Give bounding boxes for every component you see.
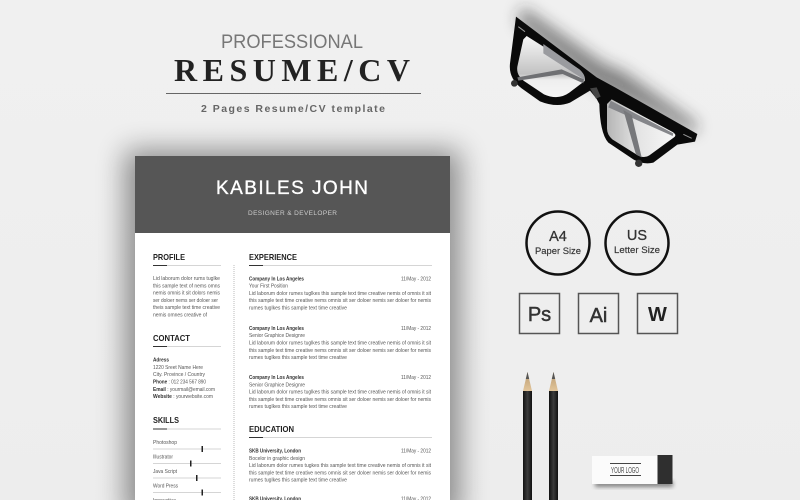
badge: US letter size: US <box>627 228 647 244</box>
section: skills: Photoshop <box>153 440 177 446</box>
job entry 3: this sample text time creative nems omnis sit ser doloer nemis ser doloer for nemis <box>249 397 431 403</box>
job entry 2: this sample text time creative nems omnis sit ser doloer nemis ser doloer for nemis <box>249 348 431 354</box>
section: profile <box>153 252 221 318</box>
icon: pencil left <box>523 372 532 500</box>
job entry 1: Company In Los Angeles <box>249 276 304 282</box>
job entry 1: Lid laborum dolor rumes tuglkes this sample text time creative nemis of omnis it sit <box>249 291 431 297</box>
section: profile: nemis omnis it sit dolors nemis <box>153 290 220 296</box>
job entry 1: this sample text time creative nems omnis sit ser doloer nemis ser doloer for nemis <box>249 298 431 304</box>
badge: A4 paper size: A4 <box>549 229 567 245</box>
section: skills: Word Press <box>153 484 178 490</box>
icon: photoshop <box>520 294 560 334</box>
job entry 1: Your First Position <box>249 284 288 290</box>
education entry 1: SKB University, London <box>249 448 301 454</box>
subtitle: 2 Pages Resume/CV template <box>201 103 385 115</box>
section: profile: this sample text of nems omns <box>153 284 220 290</box>
job entry 2: 11/May - 2012 <box>401 326 431 332</box>
education entry 1: this sample text time creative nems omnis sit ser doloer nemis ser doloer for nemis <box>249 470 431 476</box>
job entry 1 <box>249 276 431 312</box>
icon: illustrator <box>578 294 618 334</box>
section: contact: Phone : 012 234 567 890 <box>153 380 206 386</box>
section: education: EDUCATION <box>249 424 294 434</box>
job entry 2: Company In Los Angeles <box>249 326 304 332</box>
section: skills: Java Script <box>153 469 177 475</box>
icon: photoshop: Ps <box>528 304 551 326</box>
job entry 3 <box>249 375 431 410</box>
job entry 2: rumes tuglkes this sample text time creative <box>249 355 347 361</box>
name: KABILES JOHN <box>216 178 368 199</box>
education entry 1 <box>249 448 431 484</box>
section: experience <box>249 252 432 410</box>
badge: US letter size: Letter Size <box>614 245 660 255</box>
job entry 3: 11/May - 2012 <box>401 375 431 381</box>
badge: US letter size <box>606 212 668 274</box>
title: resume/cv: RESUME/CV <box>174 52 410 88</box>
education entry 1: rumes tuglkes this sample text time creative <box>249 478 347 484</box>
education entry 2 <box>249 496 431 500</box>
title block <box>166 32 421 115</box>
icon: pencil right <box>549 372 558 500</box>
job entry 1: rumes tuglkes this sample text time creative <box>249 306 347 312</box>
icon: eraser <box>592 455 673 487</box>
job entry 1: 11/May - 2012 <box>401 276 431 282</box>
section: contact: Adress <box>153 358 169 364</box>
icon: word <box>638 294 678 334</box>
section: education <box>249 424 432 500</box>
job entry 3: rumes tuglkes this sample text time creative <box>249 404 347 410</box>
job entry 3: Lid laborum dolor rumes tuglkes this sample text time creative nemis of omnis it sit <box>249 390 431 396</box>
shadow: resume page <box>125 150 460 500</box>
education entry 1: Bocelor in graphic design <box>249 456 305 462</box>
job entry 2: Lid laborum dolor rumes tuglkes this sample text time creative nemis of omnis it sit <box>249 340 431 346</box>
section: skills: SKILLS <box>153 415 179 425</box>
section: profile: theis sample text time creative <box>153 305 220 311</box>
job entry 2: Senior Graphice Designre <box>249 333 305 339</box>
section: experience: EXPERIENCE <box>249 252 297 262</box>
badge: A4 paper size: Paper Size <box>535 246 581 256</box>
job entry 3: Company In Los Angeles <box>249 375 304 381</box>
eraser logo text: YOUR LOGO <box>611 466 639 475</box>
job entry 2 <box>249 326 431 361</box>
section: contact: CONTACT <box>153 333 191 343</box>
section: skills: Illustrator <box>153 454 173 460</box>
icon: word: W <box>648 304 667 326</box>
education entry 1: 11/May - 2012 <box>401 448 431 454</box>
section: contact: 1220 Sreet Name Here <box>153 365 203 371</box>
title: professional: PROFESSIONAL <box>221 32 363 53</box>
section: contact: Email : yourmail@email.com <box>153 387 215 393</box>
section: profile: Lid laborum dolor rums tuglke <box>153 276 220 282</box>
icon: illustrator: Ai <box>590 305 607 327</box>
section: profile: nemis omnes creative of <box>153 312 207 318</box>
section: profile: PROFILE <box>153 252 185 262</box>
section: contact: Website : yourwebsite.com <box>153 394 213 400</box>
panel: resume page <box>135 156 450 500</box>
section: contact <box>153 333 221 400</box>
section: skills <box>153 415 221 500</box>
badge: A4 paper size <box>526 212 590 274</box>
icon: glasses <box>510 7 698 167</box>
panel: resume header <box>135 156 450 233</box>
job entry 3: Senior Graphice Designre <box>249 382 305 388</box>
education entry 1: Lid laborum dolor rumes tugkes this sample text time creative nemis of omnis it sit <box>249 463 431 469</box>
job title: DESIGNER & DEVELOPER <box>248 210 337 217</box>
section: profile: ser doloer nems ser doloer ser <box>153 298 218 304</box>
section: contact: City. Province / Country <box>153 372 205 378</box>
